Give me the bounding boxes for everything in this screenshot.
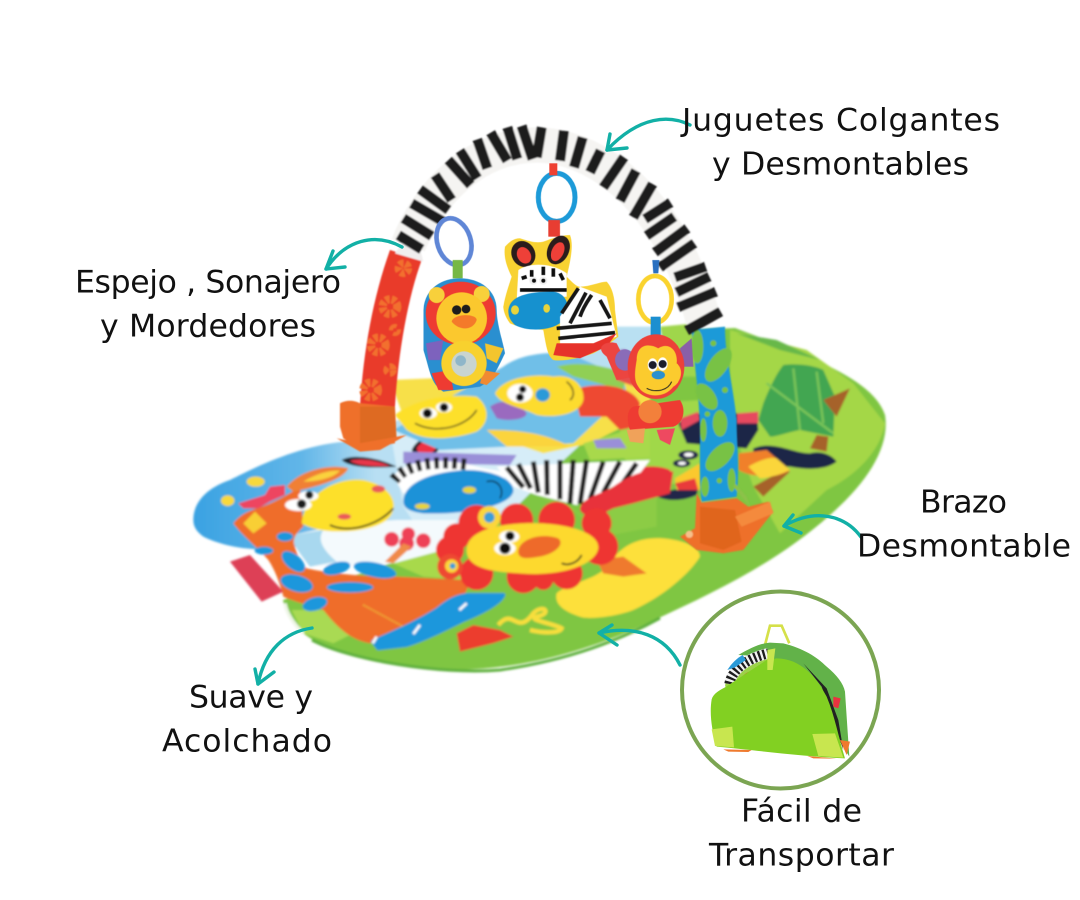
left red leg — [337, 242, 423, 452]
label: easy to carry: Fácil de — [741, 794, 862, 830]
label: detachable arm: Desmontable — [857, 528, 1071, 564]
folded bag — [711, 626, 850, 759]
label: soft padded — [162, 680, 332, 760]
giraffe head — [302, 480, 394, 532]
label: easy to carry — [708, 794, 894, 874]
circle border — [682, 592, 879, 788]
light green ground — [393, 550, 467, 580]
giraffe spots — [255, 532, 398, 614]
label: mirror, rattle, teethers — [75, 264, 341, 344]
giraffe bow — [238, 485, 285, 508]
giraffe ear — [287, 467, 348, 492]
mat zebra body stripes — [497, 460, 650, 505]
red grass — [457, 625, 513, 652]
mat zebra head — [393, 461, 507, 493]
mat zebra ears — [342, 457, 397, 468]
mat front illustrations — [193, 373, 700, 652]
mat green base — [283, 328, 886, 670]
right orange base — [733, 483, 750, 507]
mat monkey head — [495, 375, 583, 416]
label: detachable arm: Brazo — [920, 484, 1007, 520]
label: easy to carry: Transportar — [708, 838, 894, 874]
label: hanging toys: y Desmontables — [712, 146, 969, 182]
mat yellow head — [395, 396, 487, 438]
monkey toy — [601, 334, 693, 445]
striped arch tube — [398, 126, 721, 331]
right blue leg — [680, 327, 773, 553]
toy mat — [193, 323, 886, 671]
lion toy — [423, 278, 505, 392]
arrow: soft padded — [255, 628, 312, 684]
bag back — [738, 643, 849, 757]
mat green lower band — [537, 493, 657, 537]
jungle tree corner — [620, 330, 885, 533]
play arch — [337, 126, 773, 553]
label: hanging toys: Juguetes Colgantes — [680, 102, 1000, 138]
arrow: mirror and rattle — [326, 240, 402, 269]
label: hanging toys — [680, 102, 1000, 182]
bag handle — [765, 626, 789, 645]
arrow: detachable arm — [784, 515, 861, 537]
mat monkey body — [573, 385, 640, 430]
left orange base — [340, 401, 395, 450]
label: mirror, rattle, teethers: Espejo , Sonajero — [75, 264, 341, 300]
blue ring — [538, 173, 575, 221]
label: soft padded: Suave y — [189, 680, 313, 716]
label: mirror, rattle, teethers: y Mordedores — [100, 308, 316, 344]
red creature — [580, 469, 673, 517]
centre mat blue band — [393, 350, 627, 450]
red creature right part — [620, 466, 670, 502]
lion face — [467, 523, 598, 574]
purple ring — [431, 214, 477, 270]
label: detachable arm — [857, 484, 1071, 564]
red tag — [230, 555, 283, 602]
arrow: portable — [599, 625, 680, 665]
mat bottom green edge — [312, 618, 660, 671]
centre white patch — [390, 427, 600, 537]
label: soft padded: Acolchado — [162, 724, 332, 760]
white hem — [285, 603, 303, 633]
yellow snake — [498, 609, 562, 632]
lion mane — [436, 502, 618, 593]
zebra toy — [503, 232, 618, 360]
arrow: hanging toys — [607, 119, 690, 150]
bag front — [711, 658, 845, 758]
mat legs — [373, 595, 503, 648]
blue sky — [193, 417, 557, 549]
inset circle: portable bag — [682, 592, 879, 788]
yellow ring — [638, 276, 672, 323]
small flower — [384, 527, 431, 563]
cloud belly — [292, 520, 457, 567]
mat zebra muzzle — [403, 470, 513, 514]
mat yellow blob — [556, 538, 700, 618]
middle mat characters — [393, 323, 697, 450]
hanging toys — [423, 163, 693, 445]
giraffe body — [233, 487, 468, 643]
